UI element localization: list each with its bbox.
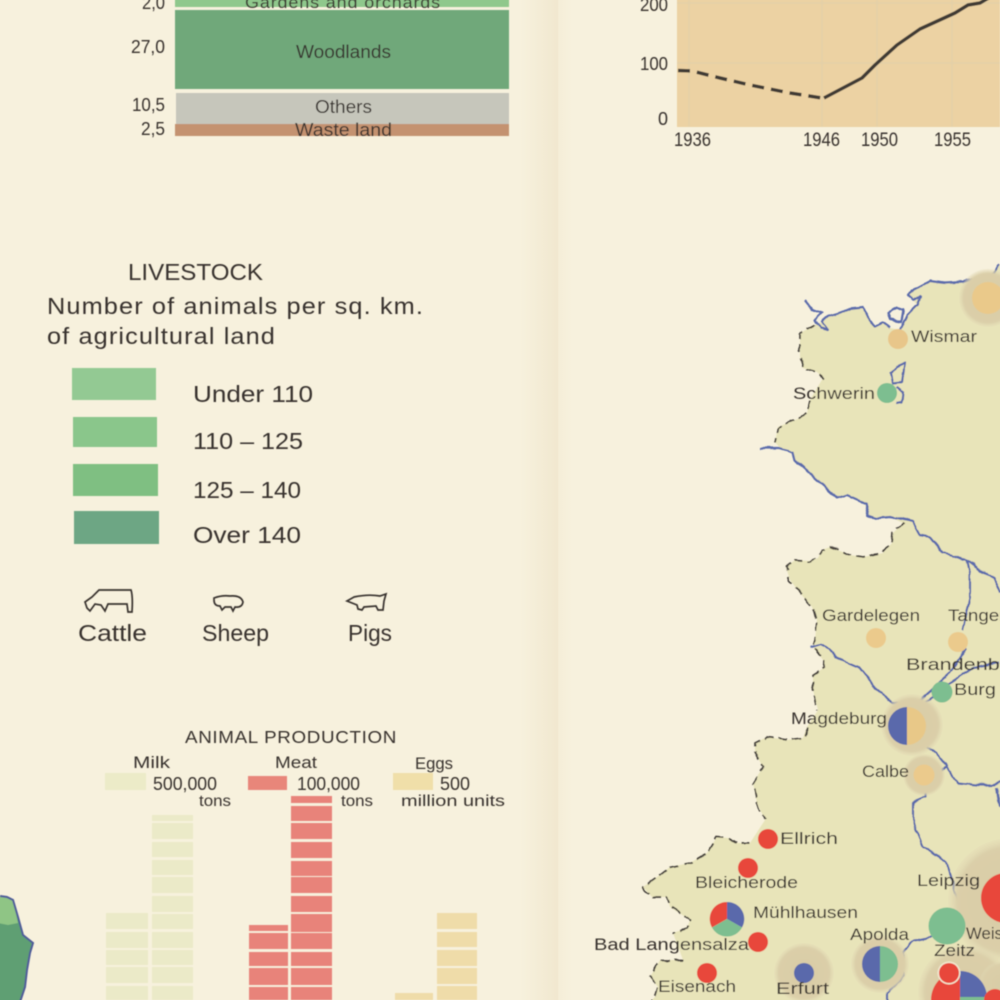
icon: sheep: Sheep bbox=[202, 620, 269, 646]
map symbol: Bleicherode bbox=[695, 858, 798, 892]
map symbol: Schwerin: Schwerin bbox=[793, 384, 875, 403]
y axis labels: 0 bbox=[658, 109, 668, 129]
legend: eggs: 500 bbox=[440, 774, 470, 794]
map symbol: Calbe: Calbe bbox=[862, 762, 909, 781]
text: subtitle bbox=[47, 293, 424, 349]
map symbol: Muhlhausen bbox=[710, 902, 858, 936]
bar: waste land: Waste land bbox=[295, 120, 392, 140]
map symbol: Rostock bbox=[959, 269, 1000, 327]
map symbol: Schwerin bbox=[793, 383, 897, 403]
icon: cattle: Cattle bbox=[78, 620, 147, 646]
heading: livestock: LIVESTOCK bbox=[128, 259, 264, 285]
map symbol: Ellrich: Ellrich bbox=[780, 829, 838, 848]
map symbol: Erfurt: Erfurt bbox=[776, 979, 829, 998]
legend: eggs: Eggs bbox=[415, 754, 453, 773]
map symbol: Bleicherode: Bleicherode bbox=[695, 873, 798, 892]
map symbol: Apolda bbox=[850, 925, 910, 993]
icon: pigs bbox=[347, 594, 392, 646]
legend: meat: Meat bbox=[275, 753, 317, 772]
legend item: under 110 bbox=[72, 368, 313, 407]
map symbol: Weissenfels bbox=[928, 908, 1000, 944]
map symbol: Gardelegen: Gardelegen bbox=[822, 606, 920, 625]
bar: gardens and orchards bbox=[142, 0, 509, 13]
x axis labels: 1936 bbox=[674, 130, 711, 151]
legend: eggs: million units bbox=[401, 793, 505, 810]
map symbol: Wismar: Wismar bbox=[911, 327, 977, 346]
bar: others: 10,5 bbox=[132, 95, 165, 115]
line: dashed pre-war section bbox=[678, 70, 822, 98]
legend item: over 140 bbox=[74, 511, 301, 548]
chart: index line chart bbox=[640, 0, 1000, 151]
map symbol: Magdeburg: Magdeburg bbox=[791, 709, 887, 728]
legend: milk: tons bbox=[199, 793, 231, 810]
map: coast and rivers bbox=[761, 264, 1000, 1000]
x axis labels: 1950 bbox=[861, 130, 898, 151]
map symbol: Zeitz and Halle group bbox=[918, 941, 1000, 1000]
icon: sheep bbox=[202, 596, 269, 646]
map symbol: Calbe bbox=[862, 754, 945, 796]
map symbol: Tangermunde bbox=[948, 606, 1000, 652]
bar: woodlands: Woodlands bbox=[296, 42, 391, 62]
map symbol: Bad Langensalza bbox=[594, 932, 768, 954]
chart: meat bars bbox=[249, 796, 332, 1000]
heading: animal production: ANIMAL PRODUCTION bbox=[185, 727, 397, 747]
map symbol: Zeitz and Halle group: Zeitz bbox=[934, 941, 975, 960]
legend: milk: Milk bbox=[133, 753, 171, 772]
map symbol: Magdeburg bbox=[791, 694, 943, 756]
map: land of the GDR bbox=[643, 264, 1000, 1000]
map symbol: Eisenach: Eisenach bbox=[658, 977, 736, 996]
bar: woodlands: 27,0 bbox=[131, 37, 165, 57]
legend item: over 140: Over 140 bbox=[193, 522, 301, 548]
icon: pigs: Pigs bbox=[348, 620, 392, 646]
map symbol: Apolda: Apolda bbox=[850, 925, 910, 944]
bar: waste land: 2,5 bbox=[141, 119, 165, 139]
bar: others: Others bbox=[315, 97, 372, 117]
legend item: 125 to 140: 125 – 140 bbox=[193, 477, 301, 503]
y axis labels: 100 bbox=[640, 54, 668, 74]
bar: waste land bbox=[141, 119, 509, 140]
bar: woodlands bbox=[131, 10, 509, 89]
map symbol: Burg: Burg bbox=[954, 680, 996, 699]
map symbol: Gardelegen bbox=[822, 606, 920, 648]
chart: milk bars bbox=[106, 815, 193, 1000]
map symbol: Bad Langensalza: Bad Langensalza bbox=[594, 935, 750, 954]
map symbol: Leipzig: Leipzig bbox=[917, 871, 980, 890]
x axis labels: 1946 bbox=[803, 130, 840, 151]
map symbol: Burg bbox=[932, 680, 996, 702]
map symbol: Leipzig bbox=[917, 838, 1000, 962]
legend item: under 110: Under 110 bbox=[193, 381, 313, 407]
x axis labels: 1955 bbox=[934, 130, 971, 151]
map symbol: Wismar bbox=[888, 327, 977, 349]
map: dashed western border bbox=[643, 325, 903, 1000]
map fragment: green region at bottom left bbox=[0, 896, 33, 1000]
chart: eggs bars bbox=[395, 913, 477, 1000]
y axis labels bbox=[640, 0, 668, 129]
map symbol: Ellrich bbox=[758, 829, 838, 849]
legend: milk bbox=[105, 753, 231, 810]
legend: meat bbox=[248, 753, 373, 810]
icon: cattle bbox=[78, 590, 147, 646]
legend item: 125 to 140 bbox=[73, 464, 301, 503]
text: subtitle: of agricultural land bbox=[47, 323, 276, 349]
line: solid post-war section bbox=[824, 0, 990, 98]
legend: meat: 100,000 bbox=[297, 774, 360, 794]
map symbol: Eisenach bbox=[658, 963, 736, 996]
legend: livestock density bbox=[72, 368, 313, 548]
map symbol: Muhlhausen: Mühlhausen bbox=[753, 903, 858, 922]
legend: meat: tons bbox=[341, 793, 373, 810]
legend: eggs bbox=[393, 754, 505, 810]
x axis labels bbox=[674, 130, 971, 151]
bar: others bbox=[132, 93, 509, 124]
legend: milk: 500,000 bbox=[153, 774, 217, 794]
legend item: 110 to 125 bbox=[73, 417, 303, 454]
chart: land use stacked bar bbox=[131, 0, 509, 140]
legend item: 110 to 125: 110 – 125 bbox=[193, 428, 303, 454]
text: subtitle: Number of animals per sq. km. bbox=[47, 293, 424, 319]
map symbol: Erfurt bbox=[774, 943, 834, 1000]
